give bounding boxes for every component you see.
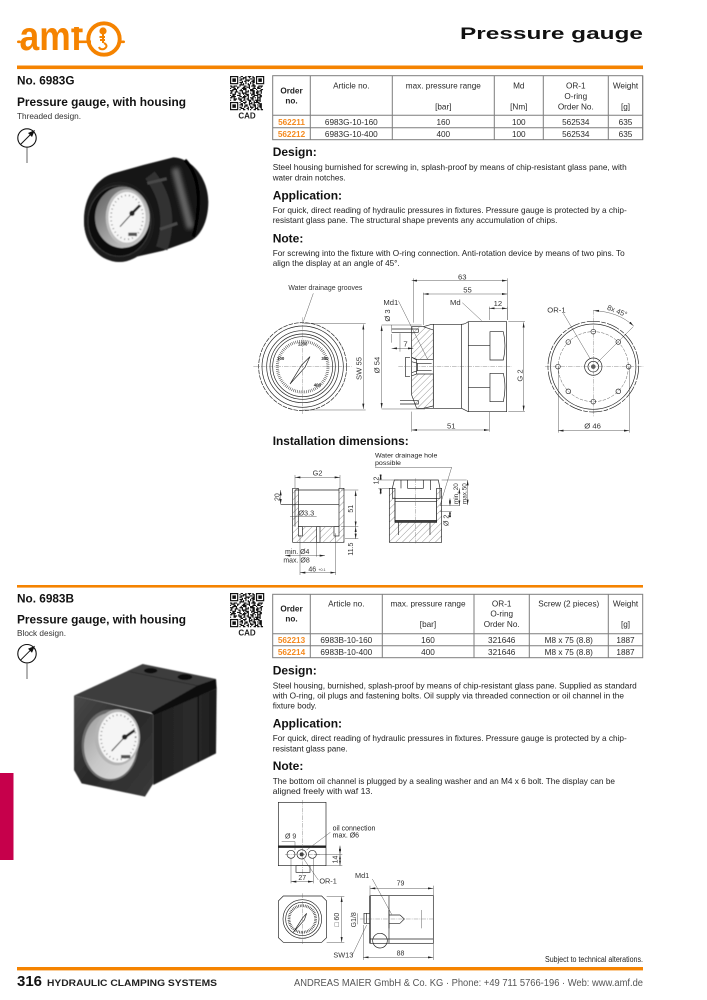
text block: note [273, 759, 615, 796]
table: 6983G specifications: 160 [436, 118, 451, 127]
installed gauge drawing: Water drainage hole [375, 452, 438, 459]
table: 6983B specifications: M8 x 75 (8.8) [545, 636, 593, 645]
front view with gauge: Water drainage grooves [288, 285, 363, 292]
table: 6983G specifications: 400 [436, 130, 451, 139]
table: 6983B specifications: 562214 [278, 648, 306, 657]
table: 6983G specifications: Article no. [333, 81, 370, 90]
product name: Pressure gauge, with housing [17, 95, 186, 109]
table: 6983B specifications: 562213 [278, 636, 306, 645]
table: 6983B specifications: Screw (2 pieces) [538, 599, 600, 608]
table: 6983B specifications: 6983B-10-160 [320, 636, 373, 645]
table: 6983B specifications: max. pressure range [390, 599, 466, 608]
text block: application: For quick, direct reading of hydraulic pressures in fixtures. Pressure gauge is protected by a chip- [273, 205, 627, 215]
section view: Md1 [383, 298, 398, 307]
bore drawing: 11.5 [348, 542, 355, 556]
section view: 55 [463, 286, 472, 295]
logo: amf [17, 21, 125, 57]
table: 6983G specifications: [g] [621, 102, 630, 111]
footer: page number and section [17, 973, 217, 990]
text block: note: For screwing into the fixture with O-ring connection. Anti-rotation device by means of two pins. To [273, 248, 625, 258]
text block: design: Steel housing burnished for screwing in, splash-proof by means of chip-resistant glass pane, with [273, 162, 627, 172]
note: technical alterations: Subject to technical alterations. [545, 955, 643, 964]
text block: application [273, 716, 627, 753]
front view with gauge: 300 [321, 356, 329, 361]
qr code: 6983G CAD [230, 77, 264, 120]
front view with gauge [253, 285, 366, 415]
footer: page number and section: 316 [17, 973, 42, 990]
top view: 27 [298, 875, 306, 882]
bore drawing: min. Ø4 [285, 549, 310, 556]
table: 6983G specifications: 562211 [278, 118, 305, 127]
side view: G1/8 [351, 912, 358, 927]
rear view: Ø 46 [584, 422, 601, 431]
side view: SW13 [333, 950, 353, 959]
header rule [17, 66, 643, 69]
table: 6983G specifications: 635 [619, 118, 633, 127]
table: 6983G specifications: Order [280, 86, 303, 95]
installed gauge drawing: possible [375, 460, 401, 467]
logo: amf: amf [20, 13, 83, 59]
section view [372, 272, 525, 432]
text block: application: resistant glass pane. [273, 743, 348, 753]
top view [278, 800, 375, 886]
table: 6983G specifications: Md [513, 81, 525, 90]
front view with gauge: 100 [277, 356, 285, 361]
text block: design [272, 145, 627, 182]
text block: design [272, 663, 637, 710]
text block: design: Design: [273, 663, 317, 677]
section view: 51 [447, 421, 456, 430]
table: 6983G specifications [273, 76, 643, 140]
technical drawing: 6983B dimensions [278, 800, 433, 960]
heading: installation dimensions: Installation dimensions: [273, 434, 409, 448]
icon: pressure gauge symbol [18, 129, 36, 163]
table: 6983G specifications: max. pressure range [406, 81, 481, 90]
text block: application: Application: [273, 716, 342, 730]
icon: pressure gauge symbol [18, 644, 36, 679]
section view: 7 [403, 340, 408, 349]
footer: page number and section: HYDRAULIC CLAMPING SYSTEMS [47, 978, 217, 989]
bore drawing: 51 [348, 505, 355, 513]
bore drawing [274, 469, 358, 575]
table: 6983B specifications: 1887 [616, 636, 635, 645]
table: 6983B specifications: no. [285, 615, 298, 624]
qr code: 6983G CAD: CAD [238, 112, 256, 120]
table: 6983G specifications: OR-1 [566, 81, 586, 90]
text block: application: For quick, direct reading of hydraulic pressures in fixtures. Pressure gauge is protected by a chip- [273, 733, 627, 743]
product number: No. 6983B [17, 592, 74, 606]
table: 6983B specifications: 321646 [488, 636, 516, 645]
rear view: 8x 45° [606, 303, 629, 319]
table: 6983B specifications: [bar] [420, 620, 436, 629]
title: Pressure gauge [460, 24, 643, 43]
rear view [545, 303, 643, 433]
product number: No. 6983G [17, 74, 74, 88]
bore drawing: max. Ø8 [283, 558, 310, 565]
table: 6983B specifications: 400 [421, 648, 435, 657]
table: 6983G specifications: [bar] [435, 102, 451, 111]
table: 6983B specifications: OR-1 [492, 599, 512, 608]
front view with gauge: 1200 [298, 341, 308, 346]
section view: Ø 54 [372, 356, 381, 373]
table: 6983G specifications: 562534 [562, 130, 590, 139]
technical drawing: installation dimensions [274, 452, 468, 575]
table: 6983B specifications: [g] [621, 620, 630, 629]
text block: design: Steel housing, burnished, splash-proof by means of chip-resistant glass pane. Supplied as standard [273, 680, 637, 690]
text block: note: aligned freely with waf 13. [273, 786, 373, 796]
table: 6983G specifications: no. [285, 96, 298, 106]
front view with gauge [278, 893, 344, 945]
top view: max. Ø6 [333, 832, 359, 839]
installed gauge drawing: Ø 2 [444, 515, 451, 526]
text block: design: fixture body. [273, 700, 317, 710]
table: 6983G specifications: O-ring [564, 92, 588, 101]
product subtitle: Threaded design. [17, 111, 81, 121]
bore drawing: G2 [313, 469, 322, 478]
text block: design: with O-ring, oil plugs and fastening bolts. Oil supply via threaded connection or oil channel in the [272, 690, 624, 700]
product subtitle: Block design. [17, 628, 66, 638]
bore drawing: +0.1 [318, 568, 326, 572]
front view with gauge: 400 [314, 383, 322, 388]
table: 6983B specifications: O-ring [490, 610, 514, 619]
side tab [0, 773, 14, 860]
installed gauge drawing: 12 [373, 476, 380, 484]
photo: threaded pressure gauge [84, 157, 208, 262]
table: 6983G specifications: 6983G-10-400 [325, 130, 378, 139]
text block: application [273, 188, 627, 225]
side view: 79 [397, 881, 405, 888]
table: 6983B specifications: 321646 [488, 648, 516, 657]
table: 6983B specifications: Article no. [328, 599, 365, 608]
table: 6983B specifications [273, 594, 643, 658]
qr code: 6983B CAD: CAD [238, 628, 256, 638]
top view: 14 [332, 855, 339, 863]
table: 6983B specifications: 1887 [616, 648, 635, 657]
table: 6983G specifications: 562212 [278, 130, 306, 139]
installed gauge drawing [373, 452, 468, 543]
table: 6983B specifications: M8 x 75 (8.8) [545, 648, 593, 657]
table: 6983G specifications: 6983G-10-160 [325, 118, 378, 127]
side view: 88 [397, 951, 405, 958]
section view: Ø 3 [383, 309, 392, 322]
table: 6983B specifications: Weight [613, 599, 639, 608]
panel: product 6983G [17, 74, 208, 262]
table: 6983G specifications: 635 [619, 130, 633, 139]
bore drawing: 46 [308, 566, 316, 573]
product name: Pressure gauge, with housing [17, 612, 186, 626]
section view: 63 [458, 272, 467, 281]
bore drawing: 20 [274, 493, 281, 501]
table: 6983G specifications: 562534 [562, 118, 590, 127]
technical drawing: 6983G dimensions [253, 272, 643, 433]
footer: contact details: ANDREAS MAIER GmbH & Co. KG · Phone: +49 711 5766-196 · Web: www.amf.de [294, 978, 643, 989]
section view: Md [450, 298, 461, 307]
section view: 12 [494, 299, 502, 308]
text block: note [273, 231, 625, 268]
table: 6983B specifications: Order [280, 604, 303, 613]
section rule [17, 585, 643, 588]
text block: note: The bottom oil channel is plugged by a sealing washer and an M4 x 6 bolt. The display can be [273, 776, 615, 786]
text block: design: Design: [273, 145, 317, 159]
table: 6983B specifications: Order No. [484, 620, 520, 629]
front view with gauge: SW 55 [354, 357, 363, 380]
section view: G 2 [515, 369, 524, 382]
photo: block pressure gauge [74, 664, 217, 797]
side view: Md1 [355, 871, 369, 880]
table: 6983G specifications: [Nm] [510, 102, 527, 111]
top view: oil connection [333, 825, 375, 832]
installed gauge drawing: min. 20 [453, 483, 460, 504]
front view with gauge: □ 60 [334, 913, 341, 927]
text block: application: resistant glass pane. The structural shape prevents any accumulation of chips. [273, 215, 557, 225]
top view: OR-1 [319, 877, 337, 886]
table: 6983B specifications: 160 [421, 636, 435, 645]
text block: design: water drain notches. [272, 172, 346, 182]
qr code: 6983B CAD [230, 594, 264, 638]
installed gauge drawing: max.50 [461, 483, 468, 504]
panel: product 6983B [17, 592, 217, 797]
footer rule [17, 967, 643, 970]
bore drawing: Ø3.3 [298, 508, 314, 517]
text block: note: Note: [273, 231, 303, 245]
text block: application: Application: [273, 188, 342, 202]
table: 6983G specifications: 100 [512, 118, 526, 127]
text block: note: align the display at an angle of 45°. [273, 258, 400, 268]
table: 6983G specifications: Order No. [558, 102, 594, 111]
table: 6983B specifications: 6983B-10-400 [320, 648, 373, 657]
top view: Ø 9 [285, 833, 296, 840]
rear view: OR-1 [547, 305, 566, 314]
table: 6983G specifications: Weight [613, 81, 639, 90]
side view [333, 871, 433, 960]
table: 6983G specifications: 100 [512, 130, 526, 139]
text block: note: Note: [273, 759, 303, 773]
